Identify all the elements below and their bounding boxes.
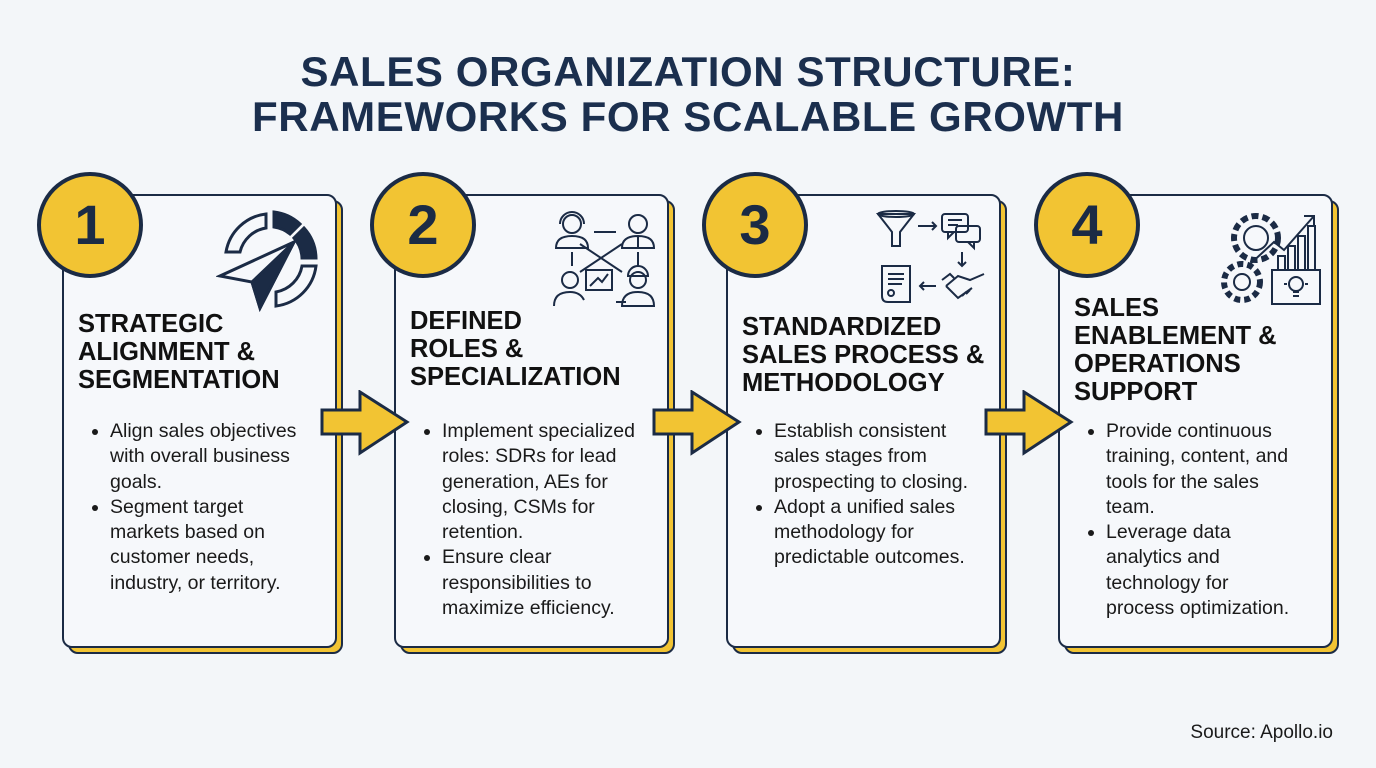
heading 4 [1074, 294, 1277, 406]
bullets 1 [92, 420, 296, 594]
heading 3: SALES PROCESS & [742, 341, 984, 369]
bullets 2: Implement specialized roles: SDRs for lead generation, AEs for closing, CSMs for retention. [442, 420, 635, 543]
heading 3: METHODOLOGY [742, 369, 945, 397]
icon: team roles [553, 211, 655, 307]
badge 2: 2 [407, 193, 439, 256]
bullets 4: Leverage data analytics and technology for [1106, 521, 1231, 594]
heading 1 [78, 310, 280, 394]
bullets 4 [1088, 420, 1289, 619]
heading 4: OPERATIONS [1074, 350, 1241, 378]
bullets 3 [756, 420, 968, 568]
panel: card 1 [62, 194, 343, 654]
bullets 3: Adopt a unified sales methodology for predictable outcomes. [774, 496, 965, 568]
badge 3 [702, 172, 808, 278]
icon: sales process [876, 210, 984, 303]
title: SALES ORGANIZATION STRUCTURE: [301, 48, 1075, 95]
heading 3 [742, 313, 984, 397]
panel: card 4 [1058, 194, 1339, 654]
badge 1 [37, 172, 143, 278]
bullets 2 [424, 420, 635, 619]
heading 1: ALIGNMENT & [78, 338, 255, 366]
bullets 3: Establish consistent sales stages from prospecting to closing. [774, 420, 968, 493]
bullets 1: Segment target markets based on customer needs, industry, or territory. [110, 496, 280, 594]
arrow 2 [652, 390, 742, 456]
panel: card 2 [394, 194, 675, 654]
heading 1: STRATEGIC [78, 310, 223, 338]
badge 4 [1034, 172, 1140, 278]
icon: gears and analytics [1221, 213, 1321, 305]
badge 1: 1 [74, 193, 106, 256]
icon: target compass [216, 210, 318, 312]
heading 4: ENABLEMENT & [1074, 322, 1277, 350]
badge 2 [370, 172, 476, 278]
title [252, 48, 1124, 140]
heading 4: SALES [1074, 294, 1159, 322]
bullets 2: Ensure clear responsibilities to maximize efficiency. [442, 546, 615, 619]
heading 2: SPECIALIZATION [410, 363, 621, 391]
badge 3: 3 [739, 193, 771, 256]
badge 4: 4 [1071, 193, 1103, 256]
heading 2 [410, 307, 621, 391]
heading 2: DEFINED [410, 307, 522, 335]
arrow 1 [320, 390, 410, 456]
panel: card 3 [726, 194, 1007, 654]
heading 3: STANDARDIZED [742, 313, 941, 341]
bullets 4: Provide continuous training, content, and tools for the sales team. [1106, 420, 1288, 518]
bullets 4: process optimization. [1106, 597, 1289, 619]
heading 1: SEGMENTATION [78, 366, 280, 394]
arrow 3 [984, 390, 1074, 456]
title: FRAMEWORKS FOR SCALABLE GROWTH [252, 93, 1124, 140]
source note: Source: Apollo.io [1190, 722, 1333, 743]
heading 4: SUPPORT [1074, 378, 1197, 406]
bullets 1: Align sales objectives with overall business goals. [110, 420, 296, 493]
heading 2: ROLES & [410, 335, 523, 363]
